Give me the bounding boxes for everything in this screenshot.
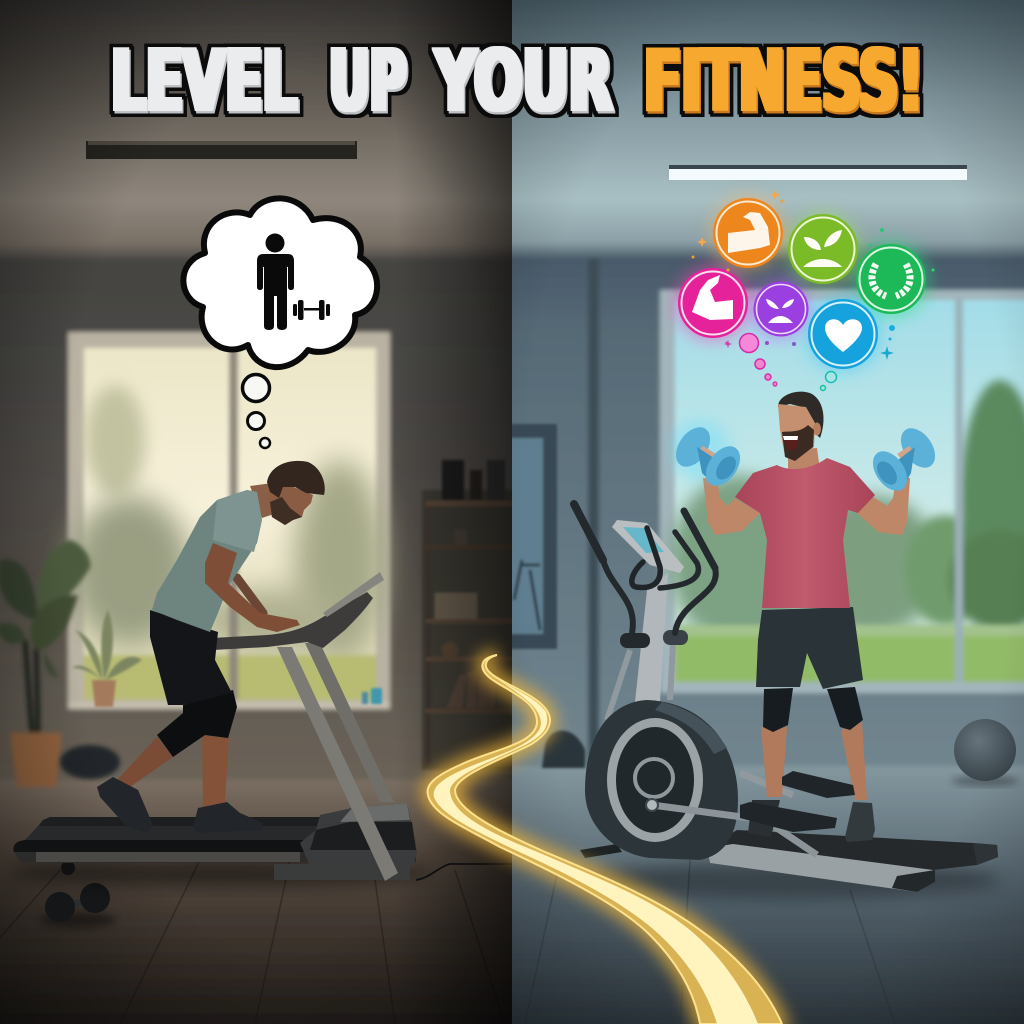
tee shirt: [152, 490, 262, 632]
icon: blue bottles on sill: [362, 688, 382, 704]
base deck: [707, 830, 998, 892]
console: [612, 520, 684, 573]
icon glows: [675, 196, 929, 372]
sparkles: [697, 190, 894, 360]
column: [635, 573, 668, 702]
path bright core: [434, 668, 758, 1024]
icon: purple sprout: [754, 282, 808, 336]
treadmill front upright: [277, 647, 398, 881]
calves: [761, 722, 867, 800]
room background: [505, 0, 1024, 1024]
shorts: [756, 607, 863, 689]
icon: green laurel: [856, 244, 926, 314]
icon: right blue dumbbell: [866, 422, 942, 497]
icon: blue heart: [808, 299, 878, 369]
crank bar: [652, 805, 817, 855]
title word UP: UP: [329, 32, 406, 131]
lower rods: [607, 643, 673, 720]
neck: [788, 448, 820, 470]
rear pedal link: [740, 773, 793, 795]
person: tired man: [97, 461, 325, 833]
kettle weights: [542, 731, 585, 768]
icon: orange muscle: [713, 198, 783, 268]
back calf: [117, 737, 173, 787]
neck: [250, 484, 272, 518]
front calf: [202, 735, 229, 808]
title word LEVEL: LEVEL: [111, 32, 297, 131]
left shoe: [748, 800, 780, 837]
ceiling light off: [86, 141, 357, 159]
ear: [813, 422, 821, 436]
machine shadow: [580, 862, 1000, 898]
face: [778, 404, 815, 461]
tee shirt: [735, 458, 875, 608]
treadmill rear upright: [305, 643, 394, 802]
flywheel housing: [585, 700, 738, 860]
pivot knobs: [620, 633, 650, 648]
beard: [270, 497, 302, 525]
power cable: [416, 864, 512, 880]
near arm: [205, 543, 300, 632]
front shoe: [194, 802, 263, 826]
elliptical pedals: [740, 771, 855, 832]
person: happy man: [669, 392, 942, 842]
title: [111, 32, 923, 131]
thought cloud: [183, 198, 377, 448]
elliptical machine: [574, 504, 1000, 898]
handlebars: [574, 504, 716, 633]
icon: left blue dumbbell: [669, 420, 747, 492]
hair: [778, 392, 824, 438]
panel: left dim gym room: [0, 0, 520, 1024]
shorts: [150, 610, 232, 705]
gym bag: [60, 745, 120, 779]
exercise ball: [951, 719, 1019, 786]
icon: small windowsill plant: [72, 610, 142, 707]
icon: pink muscle: [678, 268, 748, 338]
flywheel foot: [580, 844, 622, 858]
benefit icon cluster: [675, 190, 934, 390]
right room shading: [512, 0, 1024, 1024]
floor boards: [0, 862, 476, 995]
hair: [267, 461, 325, 498]
leggings: [763, 687, 863, 732]
right shoe: [845, 802, 875, 842]
ceiling light on: [669, 165, 967, 180]
treadmill screen bar: [323, 572, 384, 617]
treadmill: [10, 572, 512, 886]
icon: green sprout: [788, 214, 858, 284]
panel: right bright gym room: [505, 0, 1024, 1024]
back shoe: [97, 777, 152, 826]
leggings: [157, 690, 237, 757]
room background: [0, 0, 520, 1024]
icon: plant in terracotta pot: [0, 540, 90, 787]
face: [272, 487, 313, 525]
rising bubbles: [692, 200, 934, 390]
arms: [703, 478, 760, 535]
thought trail bubbles: [242, 374, 270, 448]
beard and mouth: [782, 425, 814, 461]
floor boards: [525, 860, 895, 1024]
icon: floor dumbbells: [40, 883, 116, 928]
wall mirror: [512, 423, 558, 650]
left room shading: [0, 0, 512, 1024]
icon: person with dumbbell: [257, 234, 330, 330]
title word YOUR: YOUR: [434, 32, 612, 131]
path glow: [427, 655, 782, 1024]
path band: [427, 655, 782, 1024]
far arm: [237, 578, 263, 613]
treadmill handle: [212, 592, 373, 650]
shelf side shading: [409, 0, 512, 1024]
bookshelf: [422, 460, 517, 770]
glowing yellow path: [427, 655, 782, 1024]
